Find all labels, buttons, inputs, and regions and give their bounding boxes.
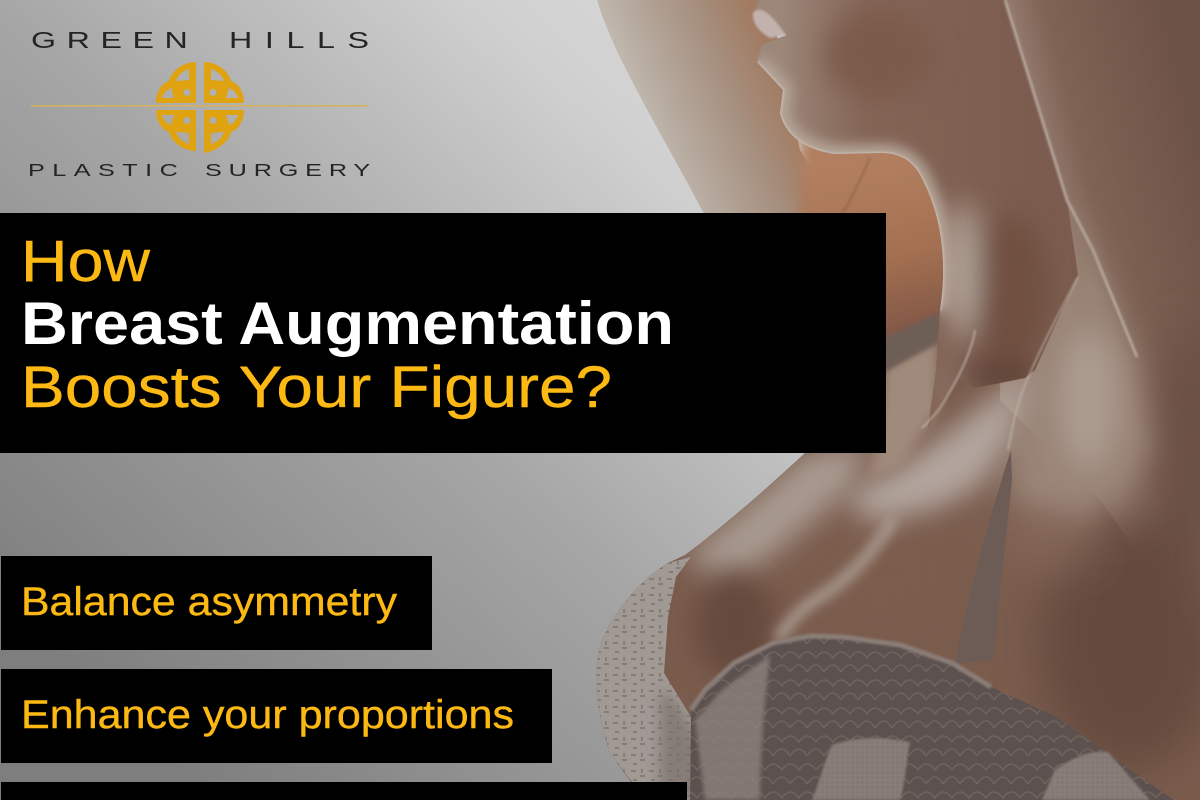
arm edge highlight bbox=[1005, 0, 1137, 357]
raised arm bbox=[597, 0, 808, 213]
benefit: balance asymmetry bbox=[1, 556, 432, 650]
title line 2: Breast Augmentation bbox=[21, 290, 674, 357]
benefit: balance asymmetry: Balance asymmetry bbox=[21, 580, 397, 624]
right arm bbox=[1000, 0, 1200, 529]
face and neck bbox=[750, 0, 1090, 430]
title line 1: How bbox=[21, 229, 151, 294]
logo word: Surgery: SURGERY bbox=[205, 160, 371, 180]
bra strap bbox=[955, 450, 1012, 664]
cleavage ridge highlight bbox=[777, 517, 893, 640]
armpit hollow bbox=[797, 140, 943, 333]
breast shadow bbox=[695, 570, 775, 680]
main bra cup bbox=[690, 636, 1174, 800]
logo horizontal rule bbox=[31, 105, 368, 107]
lit jaw glow bbox=[757, 62, 943, 310]
clavicle fold line bbox=[922, 330, 975, 428]
bra top edge bbox=[691, 636, 991, 710]
logo knot emblem bbox=[156, 62, 244, 153]
lit shoulder patch bbox=[1010, 200, 1150, 520]
benefit: cropped third panel bbox=[1, 782, 687, 800]
photo: woman in lace bra bbox=[590, 0, 1200, 800]
benefit: enhance your proportions bbox=[1, 669, 552, 763]
upper chest under collar shadow bbox=[870, 335, 938, 480]
lit collarbone band bbox=[850, 372, 1028, 520]
collarbone shadow bbox=[886, 313, 940, 372]
benefit: enhance your proportions: Enhance your proportions bbox=[21, 693, 514, 737]
lower chest tones bbox=[1012, 350, 1200, 774]
upper breast light fading to background bbox=[685, 440, 870, 590]
armpit crease bbox=[842, 158, 870, 214]
bra lace net panels bbox=[812, 738, 910, 800]
left bra cup bbox=[596, 557, 691, 800]
shoulder edge highlight bbox=[1008, 277, 1078, 450]
logo: Green Hills Plastic Surgery bbox=[28, 27, 371, 180]
title line 3: Boosts Your Figure? bbox=[21, 355, 612, 420]
logo word: Plastic: PLASTIC bbox=[28, 160, 178, 180]
lips bbox=[753, 10, 786, 38]
torso skin bbox=[590, 300, 1200, 800]
logo word: Green: GREEN bbox=[31, 27, 188, 53]
title panel bbox=[0, 213, 886, 453]
logo word: Hills: HILLS bbox=[229, 27, 369, 53]
